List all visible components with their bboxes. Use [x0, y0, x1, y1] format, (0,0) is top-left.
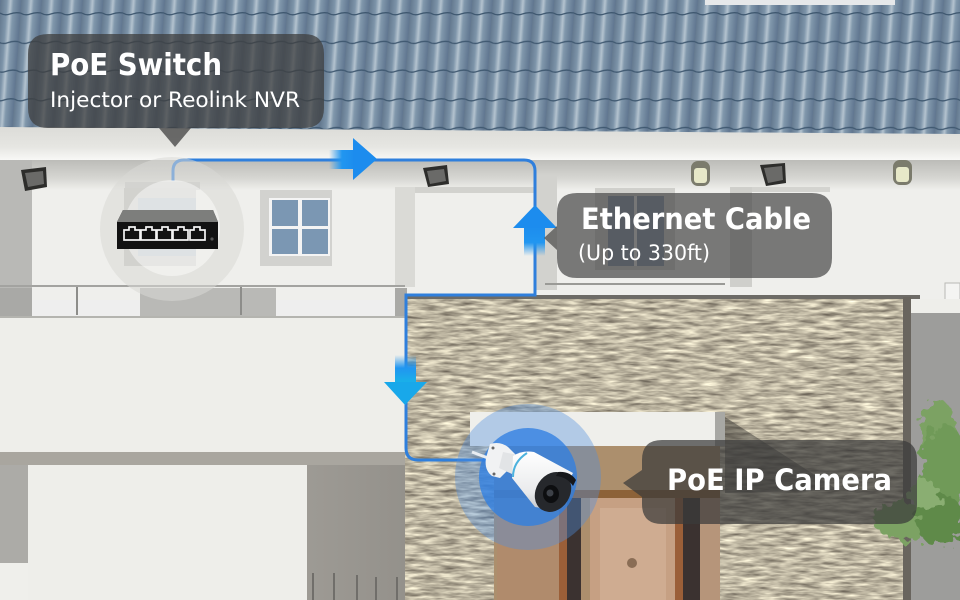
lintel shadow on stone	[725, 417, 838, 493]
flood light 3	[760, 163, 786, 186]
entrance with door	[494, 440, 720, 600]
cable	[173, 160, 535, 460]
tree	[873, 400, 960, 546]
window with blue panes	[260, 190, 332, 266]
white band	[0, 316, 405, 452]
callout: PoE IP Camera	[623, 440, 917, 524]
window behind ethernet label	[595, 188, 675, 270]
window left, behind switch	[124, 188, 196, 266]
text: cable length: (Up to 330ft)	[578, 241, 710, 265]
stone wall	[405, 295, 920, 600]
heading: Ethernet Cable: Ethernet Cable	[581, 202, 811, 236]
wall lamp 2	[893, 160, 912, 185]
heading: PoE Switch: PoE Switch	[50, 48, 222, 83]
text: injector or NVR: Injector or Reolink NVR	[50, 88, 300, 112]
balcony rail and shaded band	[0, 285, 407, 316]
heading: PoE IP Camera: PoE IP Camera	[667, 463, 892, 497]
flood light 1	[21, 167, 47, 191]
wall lamp 1	[691, 161, 710, 186]
right side wall	[911, 299, 960, 600]
switch halo	[100, 157, 244, 301]
callout: Ethernet Cable	[544, 193, 832, 278]
arrow: down on left run	[384, 355, 427, 405]
roof	[0, 0, 960, 135]
icon: PoE switch	[117, 210, 218, 249]
lower wall	[0, 452, 405, 600]
camera halo	[455, 404, 601, 550]
callout: PoE Switch	[28, 34, 324, 147]
arrow: up on right run	[513, 205, 557, 256]
upper wall	[0, 160, 960, 313]
flood light 2	[423, 165, 449, 187]
entrance lintel	[470, 412, 725, 446]
arrow: right along top	[329, 138, 377, 180]
icon: bullet camera	[472, 443, 579, 519]
fascia under the roof	[0, 127, 960, 160]
